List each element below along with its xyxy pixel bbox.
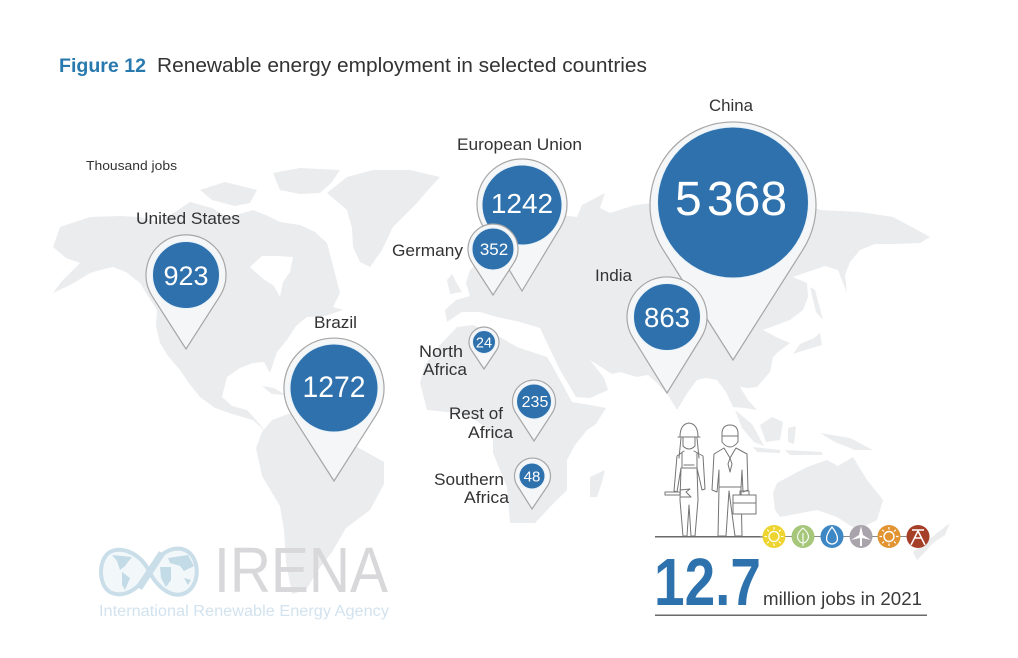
baseline rule bbox=[655, 536, 765, 538]
pin: Southern Africa bbox=[434, 458, 550, 509]
pin: European Union: 1242 bbox=[491, 188, 553, 219]
logo emblem bbox=[101, 549, 197, 595]
pin: Germany: 352 bbox=[480, 240, 508, 259]
title: Figure 12 bbox=[59, 56, 146, 77]
icon: other renewables bbox=[906, 525, 930, 548]
IRENA logo: International Renewable Energy Agency bbox=[99, 603, 389, 620]
pin: Rest of Africa bbox=[449, 380, 556, 442]
unit label: Thousand jobs bbox=[86, 158, 178, 173]
icon: female worker bbox=[665, 423, 705, 536]
icon: wind bbox=[850, 525, 872, 548]
pin: North Africa: Africa bbox=[423, 360, 468, 379]
pin: European Union: European Union bbox=[457, 135, 582, 154]
total jobs callout: million jobs in 2021 bbox=[763, 588, 922, 609]
pin: Germany bbox=[392, 224, 518, 295]
IRENA logo bbox=[99, 534, 389, 620]
pin: India: India bbox=[595, 266, 633, 285]
IRENA logo: IRENA bbox=[214, 534, 388, 606]
world map bbox=[53, 168, 950, 594]
energy icons row bbox=[760, 525, 930, 548]
pin: Southern Africa: Africa bbox=[464, 488, 510, 507]
pin: Rest of Africa: 235 bbox=[522, 394, 548, 411]
pin: China bbox=[650, 96, 816, 360]
pin: Rest of Africa: Rest of bbox=[449, 404, 503, 423]
pin: Brazil: 1272 bbox=[302, 371, 366, 404]
pin: India: 863 bbox=[644, 302, 690, 333]
pin: Southern Africa: Southern bbox=[434, 470, 504, 489]
pin: Rest of Africa: Africa bbox=[468, 423, 514, 442]
total jobs callout: 12.7 bbox=[654, 545, 761, 620]
total jobs callout bbox=[654, 545, 927, 620]
pin: Germany: Germany bbox=[392, 241, 463, 260]
pin: China: 5 368 bbox=[675, 173, 787, 226]
pin: North Africa: North bbox=[419, 342, 463, 361]
pin: United States bbox=[136, 209, 240, 349]
pin: European Union bbox=[457, 135, 582, 291]
icon: hydropower bbox=[820, 525, 844, 548]
pin: China: China bbox=[709, 96, 754, 115]
icon: male worker bbox=[712, 425, 756, 536]
pin: Southern Africa: 48 bbox=[524, 468, 540, 486]
icon: geothermal bbox=[878, 525, 900, 548]
pin: United States: United States bbox=[136, 209, 240, 228]
pin: India bbox=[595, 266, 707, 393]
pin: Brazil bbox=[284, 313, 384, 481]
pin: United States: 923 bbox=[163, 261, 209, 291]
icon: solar bbox=[762, 525, 786, 548]
icon: bioenergy bbox=[792, 525, 814, 548]
pin: North Africa bbox=[419, 327, 499, 379]
workers illustration bbox=[665, 423, 756, 536]
pin: Brazil: Brazil bbox=[314, 313, 357, 332]
title: Renewable energy employment in selected countries bbox=[157, 55, 647, 77]
pin: North Africa: 24 bbox=[476, 336, 492, 352]
